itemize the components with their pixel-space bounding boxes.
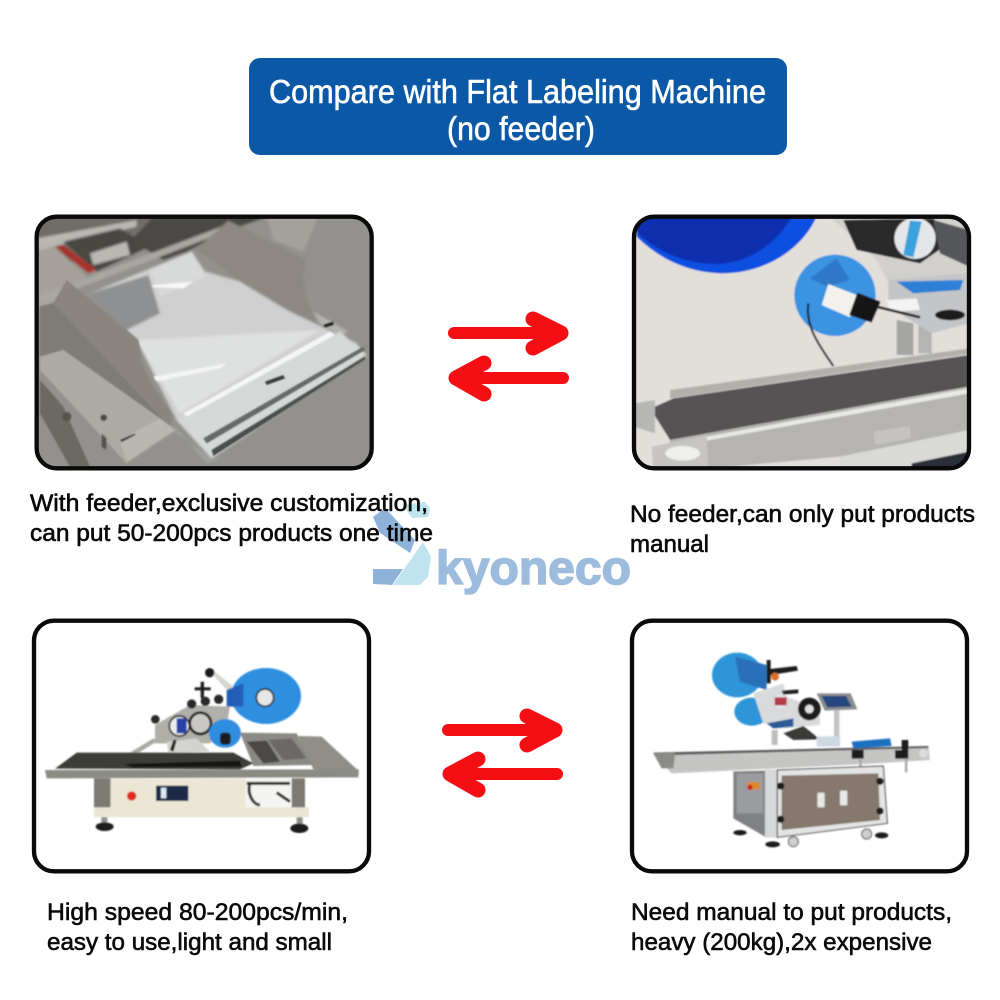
caption: high speed: easy to use,light and small: [47, 929, 332, 956]
panel: feeder labeling machine: [34, 621, 369, 871]
caption: high speed: High speed 80-200pcs/min,: [47, 899, 348, 926]
title banner: [249, 58, 787, 155]
watermark logo: [373, 502, 631, 594]
panel: feeder photo with stacked pouches: [37, 217, 372, 468]
caption: no feeder: manual: [630, 531, 709, 558]
caption: manual and heavy: [631, 899, 952, 956]
title banner: (no feeder): [447, 110, 595, 147]
caption: feeder customization: can put 50-200pcs products one time: [30, 520, 433, 547]
caption: manual and heavy: Need manual to put products,: [631, 899, 952, 926]
caption: high speed: [47, 899, 348, 956]
caption: feeder customization: [30, 490, 433, 547]
caption: feeder customization: With feeder,exclusive customization,: [30, 490, 428, 517]
panel: no-feeder conveyor close-up photo: [634, 217, 969, 468]
arrows: top comparison: [454, 319, 563, 394]
title banner: Compare with Flat Labeling Machine: [269, 73, 766, 110]
arrows: bottom comparison: [448, 716, 557, 790]
caption: manual and heavy: heavy (200kg),2x expensive: [631, 929, 932, 956]
panel: flat labeling machine without feeder: [632, 621, 967, 871]
caption: no feeder: [630, 501, 975, 558]
watermark logo: kyoneco: [436, 541, 631, 594]
caption: no feeder: No feeder,can only put products: [630, 501, 975, 528]
